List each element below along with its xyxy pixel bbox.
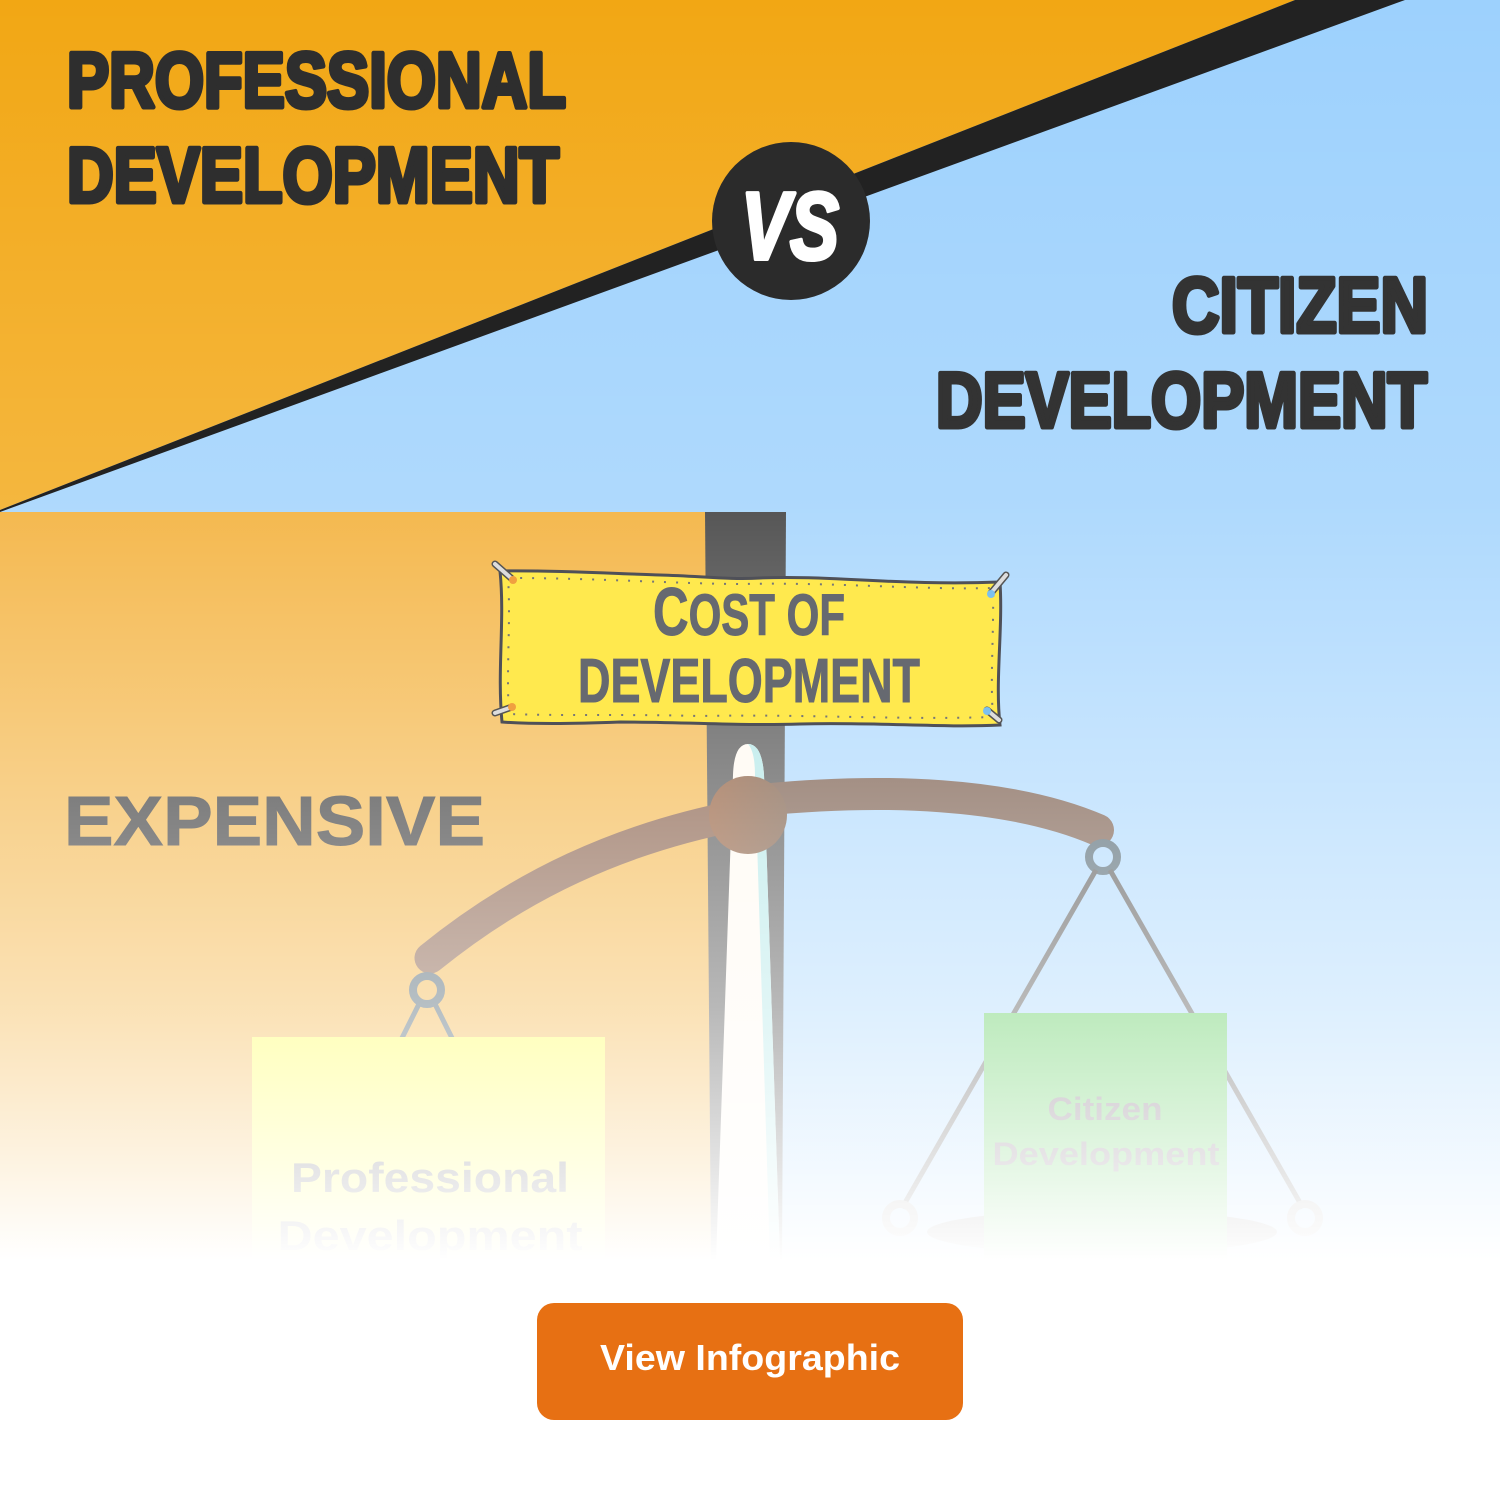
scale illustration xyxy=(252,744,1319,1267)
banner text: cost of: COST OF xyxy=(653,574,845,650)
vs badge xyxy=(712,142,870,300)
beam hub xyxy=(709,776,787,854)
title: professional development: DEVELOPMENT xyxy=(67,131,559,219)
box label: development: Development xyxy=(278,1212,583,1259)
left arm of beam xyxy=(430,815,740,958)
vs badge: VS xyxy=(741,173,839,280)
box label: development: Development xyxy=(992,1136,1220,1172)
title: professional development xyxy=(67,36,566,219)
panel: orange professional triangle xyxy=(0,0,1295,510)
title: citizen development: CITIZEN xyxy=(1172,261,1428,349)
button: view infographic xyxy=(537,1303,963,1420)
left hook ring xyxy=(413,976,441,1004)
box label: citizen: Citizen xyxy=(1048,1091,1162,1127)
title: citizen development xyxy=(936,261,1428,444)
pillar xyxy=(716,744,780,1260)
banner: cost of development xyxy=(495,564,1006,726)
right hook ring xyxy=(1089,843,1117,871)
banner cloth xyxy=(500,571,1001,726)
button: view infographic: View Infographic xyxy=(600,1337,900,1378)
right arm of beam xyxy=(760,794,1098,830)
right pan xyxy=(927,1210,1277,1254)
dark post xyxy=(705,512,786,1260)
box label: professional: Professional xyxy=(291,1154,569,1201)
right pan rings xyxy=(886,1204,1319,1232)
yellow weight box xyxy=(252,1037,605,1267)
banner text: development: DEVELOPMENT xyxy=(578,647,920,716)
title: professional development: PROFESSIONAL xyxy=(67,36,566,124)
left hanging strings xyxy=(401,1002,453,1040)
banner pins xyxy=(495,564,1006,720)
heading: expensive: EXPENSIVE xyxy=(64,782,485,860)
green weight box xyxy=(984,1013,1227,1263)
panel: expensive column xyxy=(0,512,716,1272)
diagonal divider band xyxy=(0,0,1405,512)
right hanging strings xyxy=(902,870,1303,1208)
